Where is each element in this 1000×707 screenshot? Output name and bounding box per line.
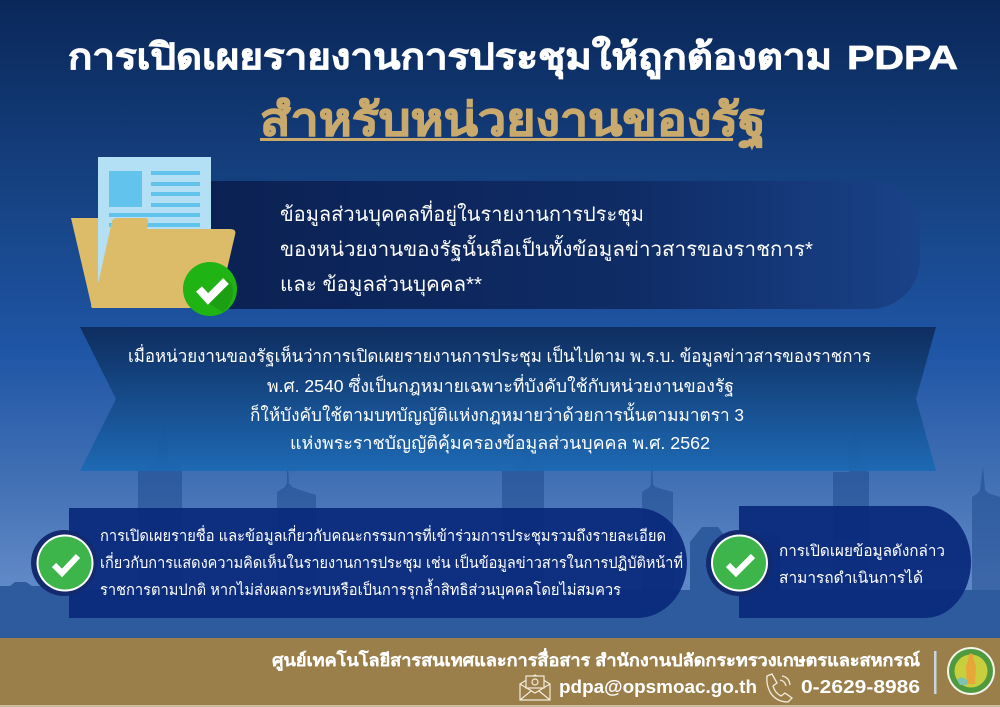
- left condition text: ราชการตามปกติ หากไม่ส่งผลกระทบหรือเป็นการรุกล้ำสิทธิส่วนบุคคลโดยไม่สมควร: [100, 578, 621, 600]
- title: PDPA: [847, 39, 958, 76]
- right condition text: การเปิดเผยข้อมูลดังกล่าว: [779, 543, 945, 561]
- right condition text: [779, 543, 945, 587]
- title: การเปิดเผยรายงานการประชุมให้ถูกต้องตาม: [68, 35, 832, 80]
- ribbon banner: [80, 327, 936, 471]
- footer organisation text: ศูนย์เทคโนโลยีสารสนเทศและการสื่อสาร สำนักงานปลัดกระทรวงเกษตรและสหกรณ์: [272, 648, 920, 672]
- panel: right condition: [739, 506, 971, 618]
- icon: ministry seal: [947, 647, 995, 695]
- left condition text: การเปิดเผยรายชื่อ และข้อมูลเกี่ยวกับคณะกรรมการที่เข้าร่วมการประชุมรวมถึงรายละเอียด: [100, 525, 666, 546]
- intro text: ข้อมูลส่วนบุคคลที่อยู่ในรายงานการประชุม: [280, 200, 644, 227]
- divider: [934, 651, 936, 694]
- subtitle: สำหรับหน่วยงานของรัฐ: [260, 94, 766, 149]
- title: [68, 35, 958, 80]
- panel: left condition: [69, 508, 687, 618]
- icon: left check badge: [31, 530, 97, 596]
- banner text: พ.ศ. 2540 ซึ่งเป็นกฎหมายเฉพาะที่บังคับใช้กับหน่วยงานของรัฐ: [267, 374, 734, 397]
- intro text: [280, 200, 813, 297]
- intro text: และ ข้อมูลส่วนบุคคล**: [280, 274, 482, 297]
- banner text: แห่งพระราชบัญญัติคุ้มครองข้อมูลส่วนบุคคล พ.ศ. 2562: [290, 433, 710, 454]
- left condition text: เกี่ยวกับการแสดงความคิดเห็นในรายงานการประชุม เช่น เป็นข้อมูลข่าวสารในการปฏิบัติหน้าที่: [100, 552, 683, 573]
- icon: folder with document: [71, 157, 235, 308]
- banner text: ก็ให้บังคับใช้ตามบทบัญญัติแห่งกฎหมายว่าด้วยการนั้นตามมาตรา 3: [250, 402, 744, 425]
- intro text: ของหน่วยงานของรัฐนั้นถือเป็นทั้งข้อมูลข่าวสารของราชการ*: [280, 235, 813, 262]
- footer phone: 0-2629-8986: [801, 677, 920, 697]
- footer band: [0, 638, 1000, 707]
- low skyline band: [0, 527, 1000, 640]
- banner text: [128, 344, 871, 454]
- icon: email envelope: [520, 675, 550, 700]
- icon: telephone: [767, 674, 792, 702]
- icon: right check badge: [706, 530, 772, 596]
- footer email: pdpa@opsmoac.go.th: [559, 677, 757, 697]
- right condition text: สามารถดำเนินการได้: [779, 569, 923, 587]
- city skyline: [0, 413, 1000, 640]
- icon: green check badge: [183, 262, 237, 316]
- banner text: เมื่อหน่วยงานของรัฐเห็นว่าการเปิดเผยรายงานการประชุม เป็นไปตาม พ.ร.บ. ข้อมูลข่าวสารของราชการ: [128, 344, 871, 367]
- panel: intro statement: [205, 181, 920, 309]
- left condition text: [100, 525, 683, 600]
